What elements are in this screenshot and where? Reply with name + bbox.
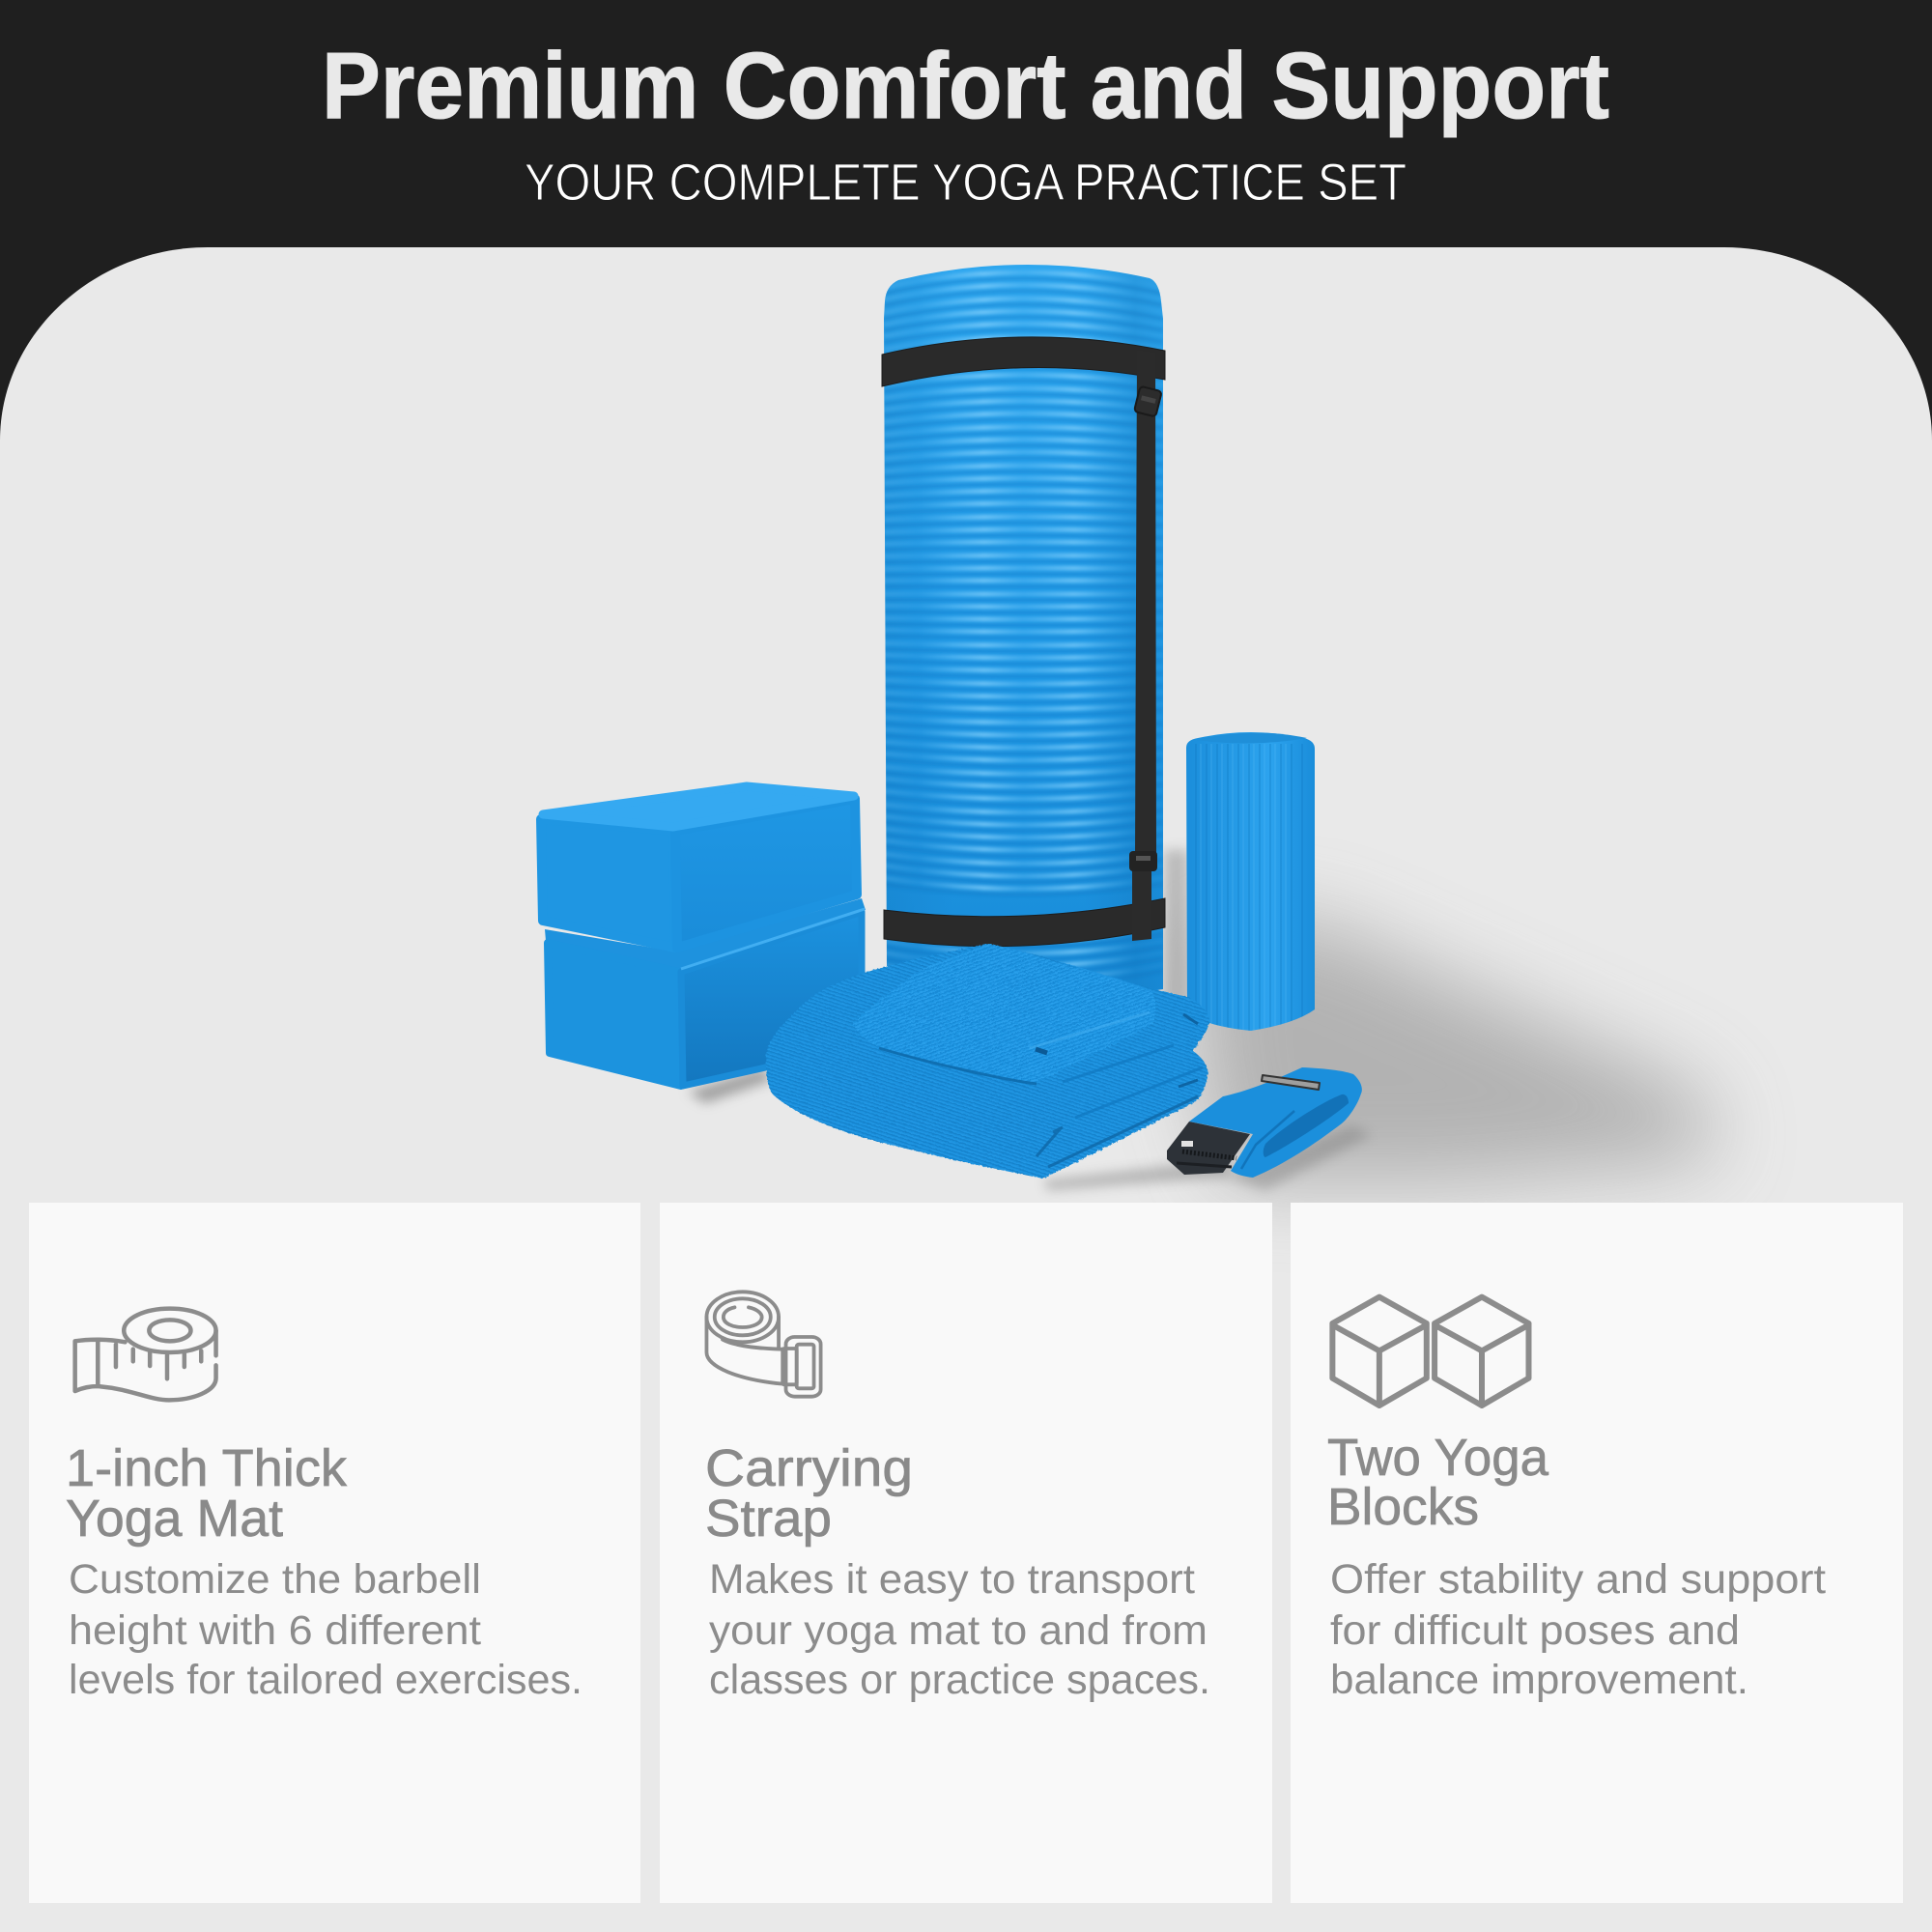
card description: Makes it easy to transport (709, 1556, 1195, 1603)
strap inner loop (1264, 1094, 1349, 1157)
panel: 1-inch thick yoga mat (29, 1203, 640, 1903)
upper yoga block (541, 786, 857, 948)
lower yoga block (545, 898, 866, 1086)
card heading: Two Yoga (1327, 1429, 1549, 1487)
folded carrying strap (1167, 1067, 1362, 1178)
card heading (1327, 1429, 1549, 1536)
card description (1330, 1556, 1826, 1703)
vertical carrying strap (1132, 350, 1156, 941)
icon: two cubes (1332, 1297, 1528, 1406)
product image: yoga set (541, 242, 1719, 1190)
card description (69, 1556, 582, 1703)
panel: carrying strap (660, 1203, 1272, 1903)
large towel (766, 944, 1209, 1179)
roller opening (1196, 732, 1307, 744)
bottom strap band (884, 898, 1165, 947)
upper buckle (1134, 386, 1162, 416)
card description: Customize the barbell (69, 1556, 481, 1603)
card heading (705, 1439, 913, 1548)
card description (709, 1556, 1210, 1703)
top strap band (882, 337, 1165, 386)
card heading: 1-inch Thick (66, 1439, 348, 1497)
yoga mat roll (879, 242, 1169, 1014)
strap buckle (1167, 1122, 1250, 1175)
panel: two yoga blocks (1291, 1203, 1903, 1903)
towel fold lines (1037, 1014, 1203, 1167)
card description: your yoga mat to and from (709, 1607, 1208, 1654)
card description: Offer stability and support (1330, 1556, 1826, 1603)
card heading (66, 1439, 348, 1548)
title: Premium Comfort and Support (322, 33, 1609, 138)
card heading: Carrying (705, 1439, 913, 1497)
foam roller (1183, 720, 1319, 1034)
card heading: Strap (705, 1490, 832, 1548)
card description: levels for tailored exercises. (69, 1657, 582, 1703)
card description: height with 6 different (69, 1607, 481, 1654)
lower buckle (1129, 851, 1157, 871)
icon: measuring tape (75, 1309, 216, 1400)
strap metal clip (1262, 1075, 1320, 1090)
card description: balance improvement. (1330, 1657, 1748, 1703)
card description: classes or practice spaces. (709, 1657, 1210, 1703)
card heading: Blocks (1327, 1478, 1479, 1536)
icon: rolled strap with buckle (706, 1292, 821, 1397)
subtitle: YOUR COMPLETE YOGA PRACTICE SET (525, 154, 1406, 212)
card heading: Yoga Mat (66, 1490, 283, 1548)
floor shadow (688, 850, 1719, 1190)
card description: for difficult poses and (1330, 1607, 1740, 1654)
small towel (853, 944, 1155, 1083)
small towel crease (879, 1012, 1150, 1084)
